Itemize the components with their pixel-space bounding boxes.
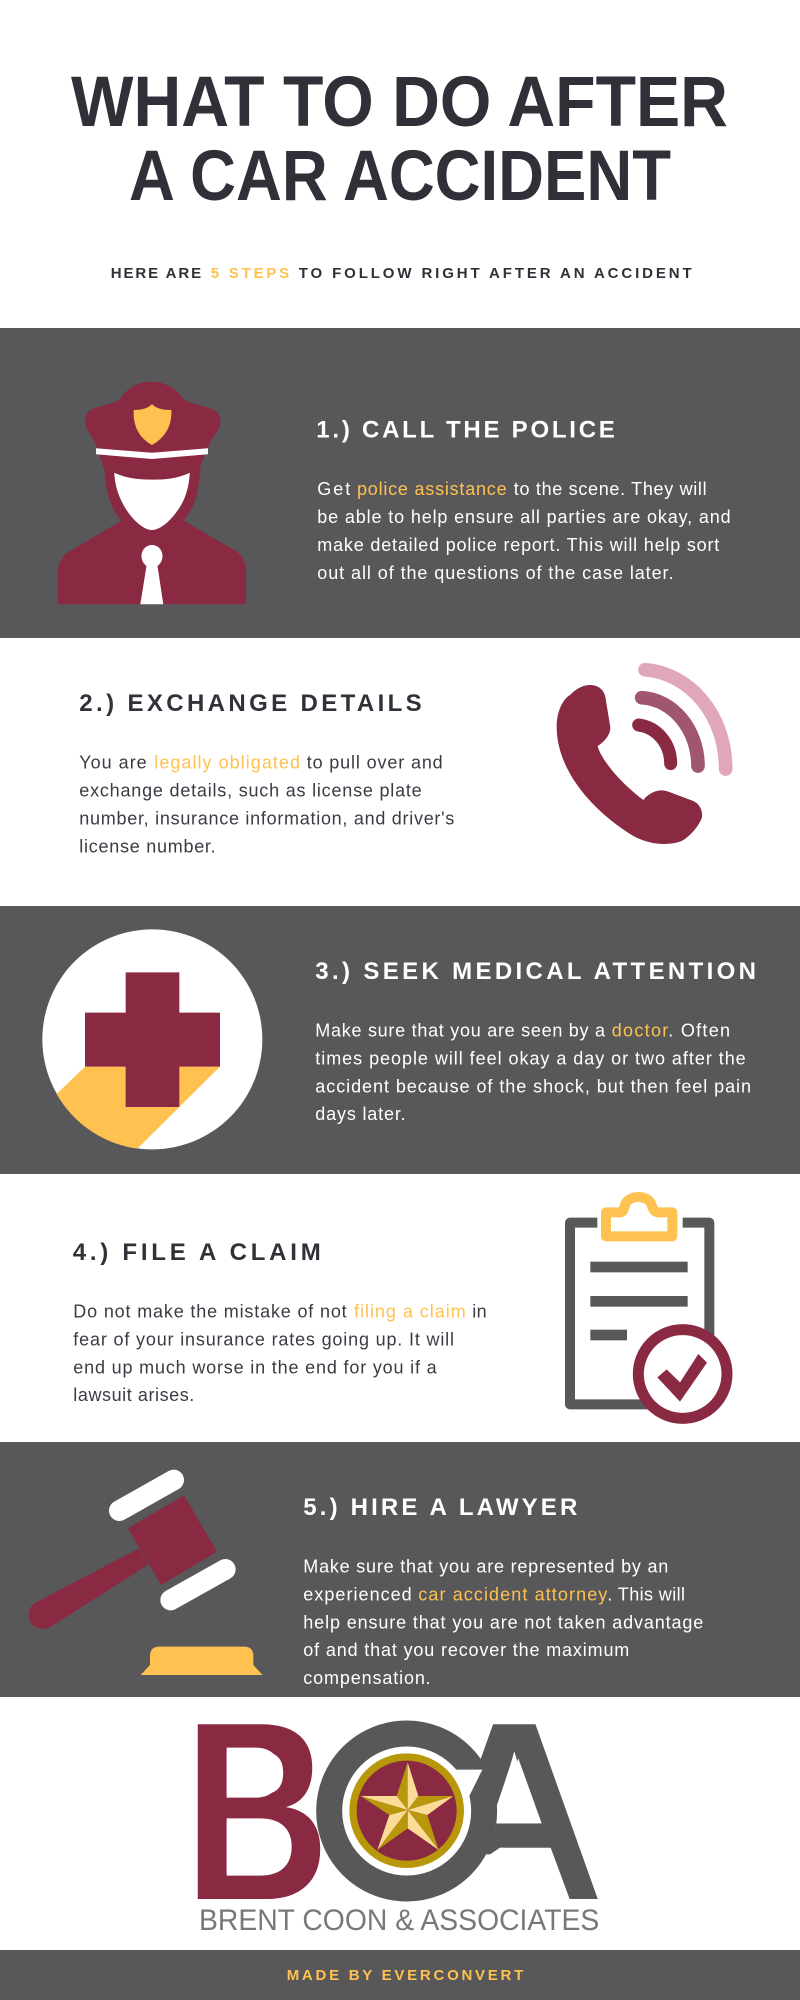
icon: medical cross bbox=[42, 929, 262, 1149]
text block: step 3: Make sure that you are seen by a bbox=[315, 1021, 606, 1041]
logo star bbox=[361, 1762, 453, 1850]
text block: step 2: legally obligated bbox=[154, 752, 300, 772]
subtitle: TO FOLLOW RIGHT AFTER AN ACCIDENT bbox=[299, 265, 692, 282]
logo wordmark: BRENT COON & ASSOCIATES bbox=[199, 1904, 599, 1937]
text block: step 4: lawsuit arises. bbox=[73, 1385, 194, 1405]
text block: step 4: in bbox=[472, 1301, 487, 1321]
text block: step 3: doctor bbox=[612, 1021, 668, 1041]
text block: step 2: exchange details, such as license plate bbox=[79, 780, 422, 800]
text block: step 1 bbox=[317, 479, 731, 583]
icon: badge bbox=[134, 404, 171, 445]
text block: step 2: license number. bbox=[79, 836, 216, 856]
text block: step 2 bbox=[79, 752, 454, 856]
text block: step 3: days later. bbox=[315, 1104, 406, 1124]
title: A CAR ACCIDENT bbox=[129, 137, 671, 216]
text block: step 5: experienced bbox=[303, 1584, 412, 1604]
text block: step 5: Make sure that you are represented by an bbox=[303, 1556, 668, 1576]
text block: step 5 bbox=[303, 1556, 703, 1688]
text block: step 1: Get bbox=[317, 479, 350, 499]
icon: cap band bbox=[96, 448, 208, 459]
icon: tie bbox=[140, 545, 163, 604]
icon: face bbox=[114, 473, 190, 530]
icon: phone bbox=[557, 670, 726, 844]
text block: step 5: . This will bbox=[607, 1584, 685, 1604]
subtitle bbox=[111, 265, 692, 282]
logo: Brent Coon and Associates: B bbox=[184, 1669, 329, 1953]
text block: step 3: . Often bbox=[668, 1021, 730, 1041]
text block: step 4: fear of your insurance rates going up. It will bbox=[73, 1329, 454, 1349]
subtitle: 5 STEPS bbox=[211, 265, 289, 282]
text block: step 5: help ensure that you are not taken advantage bbox=[303, 1612, 703, 1632]
panel: step 2 exchange details bbox=[0, 638, 800, 906]
text block: step 5: compensation. bbox=[303, 1668, 431, 1688]
panel: step 1 call the police bbox=[0, 328, 800, 638]
footer credit: MADE BY EVERCONVERT bbox=[287, 1967, 523, 1984]
text block: step 2: number, insurance information, and driver's bbox=[79, 808, 454, 828]
text block: step 3 bbox=[315, 1021, 751, 1124]
text block: step 1: out all of the questions of the case later. bbox=[317, 563, 674, 583]
text block: step 1: make detailed police report. This will help sort bbox=[317, 535, 719, 555]
text block: step 1: to the scene. They will bbox=[514, 479, 707, 499]
title: WHAT TO DO AFTER bbox=[71, 63, 728, 142]
text block: step 4: end up much worse in the end for you if a bbox=[73, 1357, 438, 1377]
text block: step 1: police assistance bbox=[357, 479, 507, 499]
heading: step 5: 5.) HIRE A LAWYER bbox=[303, 1494, 577, 1521]
subtitle: HERE ARE bbox=[111, 265, 201, 282]
heading: step 1: 1.) CALL THE POLICE bbox=[316, 417, 615, 444]
icon: clipboard bbox=[570, 1197, 727, 1418]
text block: step 3: accident because of the shock, but then feel pain bbox=[315, 1076, 751, 1096]
logo: Brent Coon and Associates: A bbox=[424, 1669, 604, 1953]
panel: step 5 hire a lawyer bbox=[0, 1442, 800, 1697]
header bbox=[71, 63, 728, 282]
text block: step 5: car accident attorney bbox=[418, 1584, 607, 1604]
logo: Brent Coon and Associates bbox=[184, 1669, 604, 1953]
title bbox=[71, 63, 728, 216]
footer bbox=[0, 1950, 800, 2000]
icon: police officer bbox=[58, 382, 246, 604]
text block: step 4: Do not make the mistake of not bbox=[73, 1301, 347, 1321]
text block: step 2: You are bbox=[79, 752, 147, 772]
panel: step 3 seek medical attention bbox=[0, 906, 800, 1174]
icon: gavel bbox=[29, 1480, 263, 1675]
text block: step 1: be able to help ensure all parties are okay, and bbox=[317, 507, 731, 527]
text block: step 3: times people will feel okay a day or two after the bbox=[315, 1048, 746, 1068]
text block: step 4: filing a claim bbox=[354, 1301, 466, 1321]
heading: step 2: 2.) EXCHANGE DETAILS bbox=[79, 690, 422, 717]
text block: step 5: of and that you recover the maximum bbox=[303, 1640, 629, 1660]
logo medallion bbox=[349, 1753, 464, 1868]
heading: step 4: 4.) FILE A CLAIM bbox=[73, 1239, 321, 1266]
heading: step 3: 3.) SEEK MEDICAL ATTENTION bbox=[315, 958, 756, 985]
text block: step 4 bbox=[73, 1301, 487, 1405]
text block: step 2: to pull over and bbox=[307, 752, 443, 772]
panel: step 4 file a claim bbox=[0, 1174, 800, 1442]
